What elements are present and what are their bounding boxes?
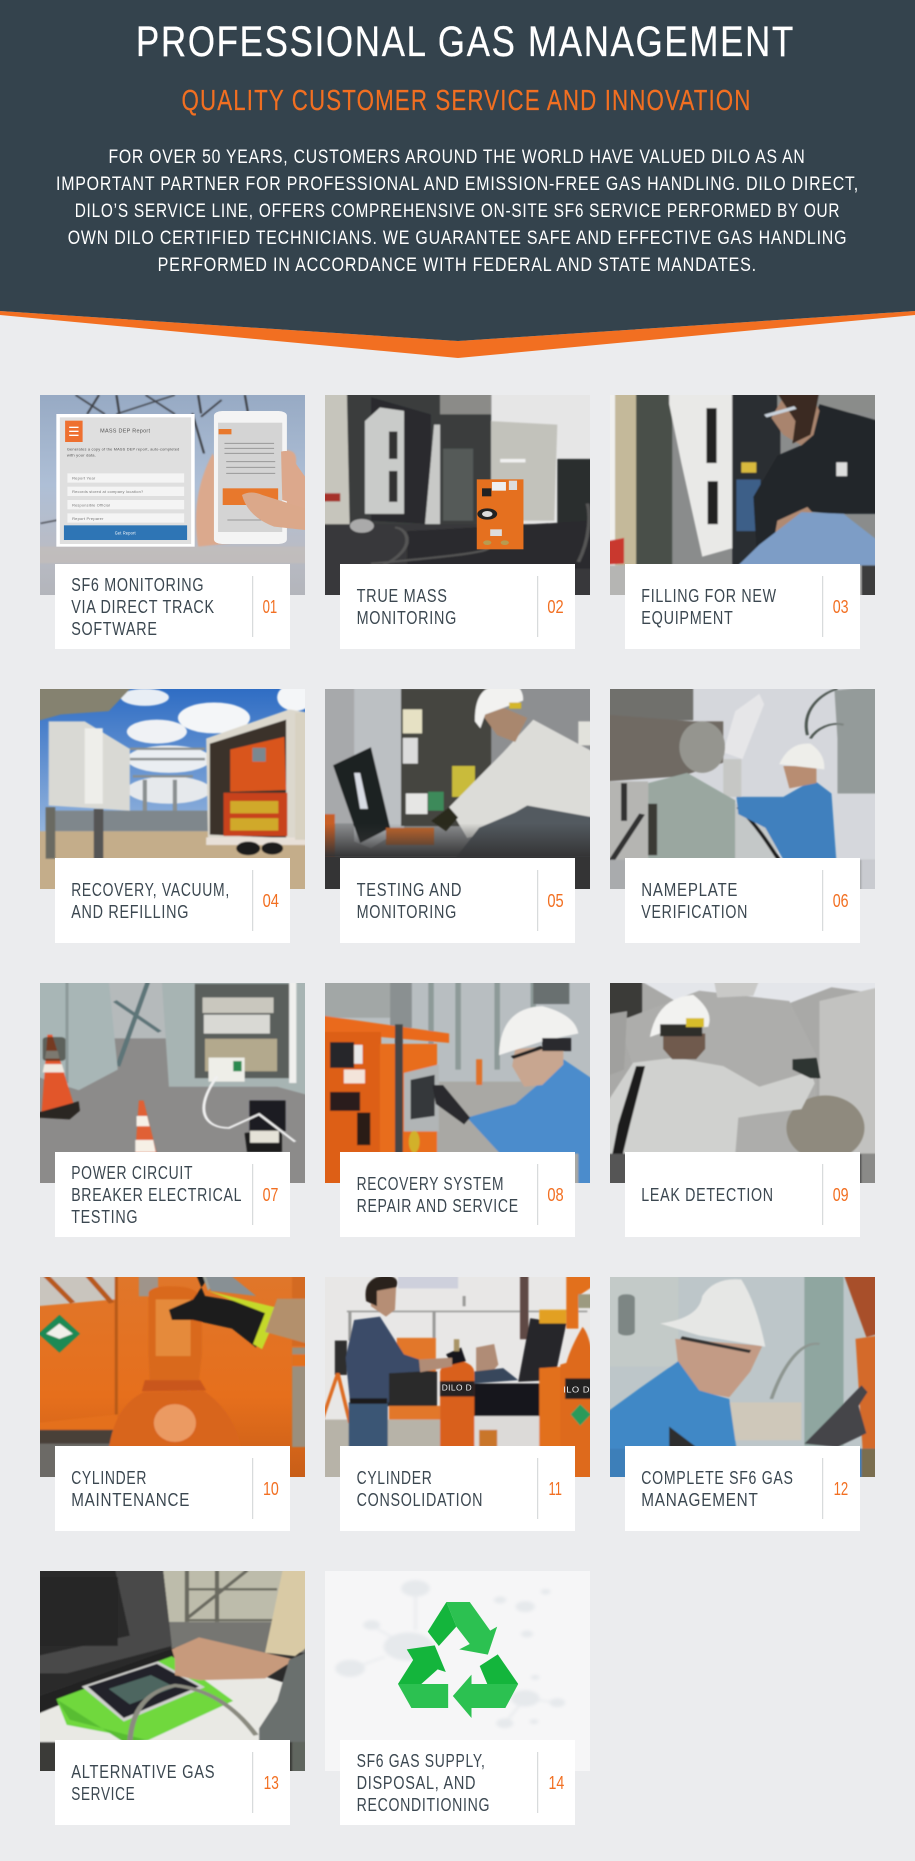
subtitle: QUALITY CUSTOMER SERVICE AND INNOVATION bbox=[182, 85, 752, 117]
panel: service 05 bbox=[321, 686, 594, 943]
number: 06 bbox=[833, 891, 848, 911]
number: 02 bbox=[547, 597, 564, 617]
photo: open cabinet with orange monitor bbox=[325, 395, 590, 595]
service name: VIA DIRECT TRACK bbox=[71, 597, 215, 617]
number: 09 bbox=[833, 1185, 848, 1205]
service name bbox=[357, 1468, 483, 1510]
number: 05 bbox=[547, 891, 564, 911]
label card bbox=[340, 1152, 575, 1237]
number: 11 bbox=[548, 1479, 562, 1499]
service name bbox=[357, 1751, 490, 1815]
number: 01 bbox=[263, 597, 277, 617]
panel: service 11 bbox=[321, 1272, 600, 1531]
photo: technician verifying nameplate bbox=[610, 689, 875, 889]
panel: service 12 bbox=[606, 1274, 879, 1531]
label card bbox=[625, 858, 860, 943]
service name: MONITORING bbox=[357, 902, 457, 922]
label card bbox=[55, 564, 290, 649]
service name: CYLINDER bbox=[71, 1468, 147, 1488]
report form window: MASS DEP Report bbox=[100, 428, 151, 434]
label card bbox=[625, 564, 860, 649]
number: 14 bbox=[548, 1773, 564, 1793]
intro paragraph: PERFORMED IN ACCORDANCE WITH FEDERAL AND STATE MANDATES. bbox=[158, 254, 757, 276]
report form window: Get Report bbox=[115, 531, 136, 536]
service name: DISPOSAL, AND bbox=[357, 1773, 476, 1793]
orange chevron bbox=[0, 311, 915, 358]
photo: technician filling new equipment bbox=[610, 395, 875, 595]
service name bbox=[357, 586, 457, 628]
service name: ALTERNATIVE GAS bbox=[71, 1762, 215, 1782]
orange monitoring unit bbox=[477, 479, 523, 549]
report form window: Report Preparer bbox=[72, 517, 104, 521]
report form window: Report Year bbox=[72, 477, 95, 481]
panel: service 14 bbox=[325, 1571, 590, 1825]
bottom shadow fade bbox=[325, 823, 590, 857]
photo: technician testing with case bbox=[325, 689, 590, 889]
report form window bbox=[56, 414, 195, 547]
photo: recycling symbol over molecules bbox=[325, 1571, 590, 1771]
service name: SOFTWARE bbox=[71, 619, 158, 639]
icon: recycling arrows bbox=[398, 1602, 518, 1718]
service name: SERVICE bbox=[71, 1784, 135, 1804]
label card bbox=[625, 1152, 860, 1237]
photo: technician at orange recovery system bbox=[325, 983, 590, 1183]
panel: service 06 bbox=[603, 686, 879, 943]
number: 04 bbox=[263, 891, 279, 911]
molecule background bbox=[336, 1580, 565, 1728]
service name: AND REFILLING bbox=[71, 902, 189, 922]
photo: substation and orange trailer unit bbox=[40, 689, 305, 889]
photo: technicians consolidating cylinders bbox=[325, 1277, 590, 1477]
label card bbox=[340, 564, 575, 649]
service name bbox=[71, 575, 215, 639]
label card bbox=[340, 858, 575, 943]
service name: REPAIR AND SERVICE bbox=[357, 1196, 519, 1216]
photo: technician managing SF6 gas bbox=[610, 1277, 875, 1477]
service name bbox=[71, 1468, 190, 1510]
label card bbox=[340, 1740, 575, 1825]
label card bbox=[625, 1446, 860, 1531]
label card bbox=[55, 1152, 290, 1237]
service name bbox=[641, 586, 777, 628]
service name: RECOVERY, VACUUM, bbox=[71, 880, 230, 900]
service name: TESTING AND bbox=[357, 880, 462, 900]
number: 10 bbox=[263, 1479, 279, 1499]
service name bbox=[357, 1174, 519, 1216]
service name: VERIFICATION bbox=[641, 902, 748, 922]
service name: CYLINDER bbox=[357, 1468, 432, 1488]
number: 12 bbox=[834, 1479, 848, 1499]
panel: service 03 bbox=[606, 392, 879, 649]
dark header panel bbox=[0, 0, 915, 341]
service name: TESTING bbox=[71, 1207, 138, 1227]
header banner bbox=[0, 0, 915, 358]
cylinder lettering bbox=[442, 1384, 590, 1394]
label card bbox=[55, 858, 290, 943]
label card bbox=[55, 1740, 290, 1825]
service name: SF6 GAS SUPPLY, bbox=[357, 1751, 486, 1771]
panel: service 01 bbox=[35, 395, 309, 649]
number: 13 bbox=[264, 1773, 279, 1793]
panel: service 09 bbox=[606, 980, 879, 1237]
service name: MONITORING bbox=[357, 608, 457, 628]
panel: service 07 bbox=[36, 980, 309, 1237]
photo: technician doing leak detection on tank bbox=[610, 983, 875, 1183]
service name bbox=[357, 880, 462, 922]
service name: CONSOLIDATION bbox=[357, 1490, 483, 1510]
photo: hand on green alternative gas device bbox=[40, 1571, 305, 1771]
service name: POWER CIRCUIT bbox=[71, 1163, 193, 1183]
report form window: Records stored at company location? bbox=[72, 490, 143, 494]
service name bbox=[641, 1468, 794, 1510]
panel: service 08 bbox=[321, 980, 594, 1237]
service name: RECONDITIONING bbox=[357, 1795, 490, 1815]
report form window: Generates a copy of the MASS DEP report, auto-completed bbox=[67, 448, 180, 452]
photo: gloved hand on orange cylinder bbox=[40, 1277, 305, 1477]
service name: LEAK DETECTION bbox=[641, 1185, 774, 1205]
label card bbox=[55, 1446, 290, 1531]
service name: NAMEPLATE bbox=[641, 880, 738, 900]
service name bbox=[71, 880, 230, 922]
cylinder lettering: DILO D bbox=[442, 1384, 472, 1392]
number: 07 bbox=[263, 1185, 278, 1205]
service name: TRUE MASS bbox=[357, 586, 448, 606]
service name: COMPLETE SF6 GAS bbox=[641, 1468, 794, 1488]
report form window: Responsible Official bbox=[72, 504, 110, 508]
photo: breaker cabinets with cones and tester bbox=[40, 983, 305, 1183]
panel: service 02 bbox=[321, 392, 594, 649]
service name: BREAKER ELECTRICAL bbox=[71, 1185, 242, 1205]
label card bbox=[340, 1446, 575, 1531]
number: 08 bbox=[547, 1185, 564, 1205]
service name: SF6 MONITORING bbox=[71, 575, 204, 595]
service name: EQUIPMENT bbox=[641, 608, 734, 628]
phone bbox=[214, 411, 305, 544]
service name bbox=[71, 1762, 215, 1804]
service name: RECOVERY SYSTEM bbox=[357, 1174, 504, 1194]
service name bbox=[71, 1163, 242, 1227]
panel: service 04 bbox=[36, 684, 313, 943]
panel: service 10 bbox=[36, 1274, 309, 1531]
intro paragraph bbox=[56, 146, 859, 276]
number: 03 bbox=[833, 597, 848, 617]
service name bbox=[641, 880, 748, 922]
photo: report form and phone over transmission tower bbox=[40, 395, 552, 595]
service name: MAINTENANCE bbox=[71, 1490, 190, 1510]
panel: service 13 bbox=[36, 1568, 313, 1825]
service name: FILLING FOR NEW bbox=[641, 586, 777, 606]
report form window: with your data. bbox=[66, 454, 96, 458]
service name: MANAGEMENT bbox=[641, 1490, 759, 1510]
